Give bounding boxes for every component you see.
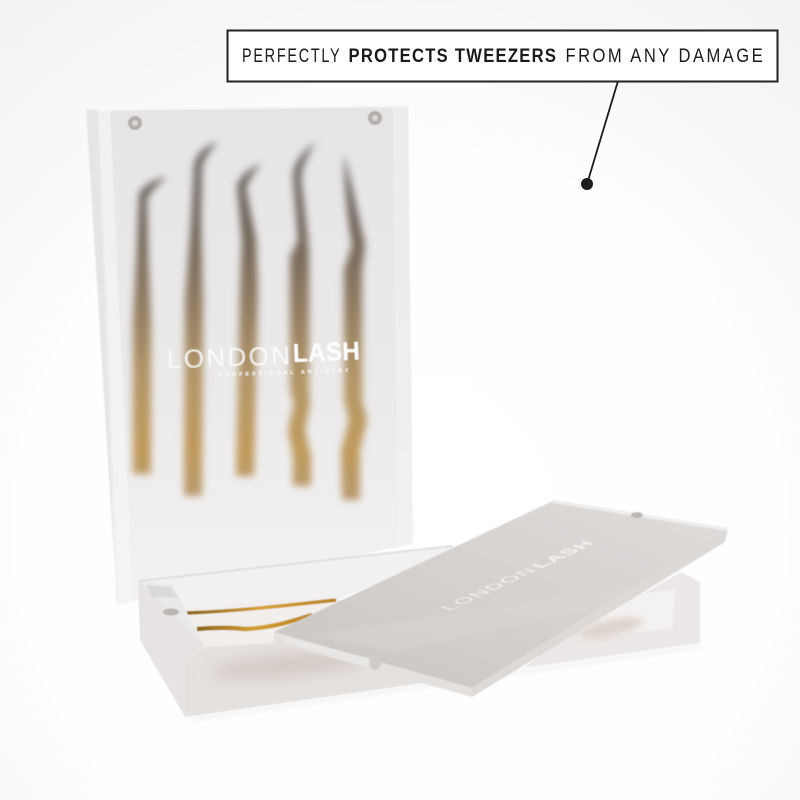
blurred tweezers — [133, 142, 367, 500]
standing acrylic case — [86, 105, 413, 605]
screw top right — [368, 111, 382, 125]
box screw — [163, 608, 179, 616]
lid front edge — [274, 632, 472, 697]
callout text: PROTECTS TWEEZERS — [348, 45, 556, 66]
tweezers inside box — [187, 600, 336, 629]
lid right edge — [472, 528, 728, 697]
box front wall — [185, 640, 430, 717]
case logo: LONDON — [166, 340, 290, 374]
lid logo: LONDON — [436, 566, 541, 612]
lid screw near — [369, 654, 381, 670]
acrylic lid — [274, 500, 728, 697]
tweezer 4 — [288, 142, 316, 486]
gold tweezer lower — [197, 615, 312, 629]
gold tweezer upper — [187, 600, 336, 613]
box front shadow — [209, 648, 371, 682]
tweezer 3 — [236, 164, 261, 476]
callout text: PERFECTLY — [242, 44, 340, 67]
case left edge — [86, 109, 126, 605]
box left wall — [138, 581, 205, 648]
lid logo — [436, 539, 598, 612]
case logo: PROFESSIONAL ARTISTRY — [218, 368, 349, 379]
lid screw far — [631, 512, 643, 518]
tweezer 5 — [341, 154, 367, 500]
case front face — [97, 105, 413, 605]
tweezer 2 — [184, 142, 218, 496]
callout dot — [581, 178, 593, 190]
box back edge — [138, 545, 460, 613]
lid top face — [274, 500, 728, 688]
lid top highlight — [553, 500, 728, 531]
box right section — [523, 572, 700, 668]
box shadow — [190, 645, 700, 721]
callout text: FROM ANY DAMAGE — [566, 45, 763, 66]
lid logo: LASH — [527, 539, 598, 570]
callout connector line — [587, 81, 618, 184]
tweezer 1 — [133, 177, 167, 474]
box inner floor — [160, 596, 340, 650]
lower acrylic box — [138, 545, 700, 721]
case logo: LASH — [292, 336, 360, 368]
callout box — [228, 30, 778, 82]
callout text — [242, 44, 763, 67]
case logo — [166, 336, 361, 380]
screw top left — [128, 116, 142, 130]
lid near edge band — [280, 635, 375, 668]
